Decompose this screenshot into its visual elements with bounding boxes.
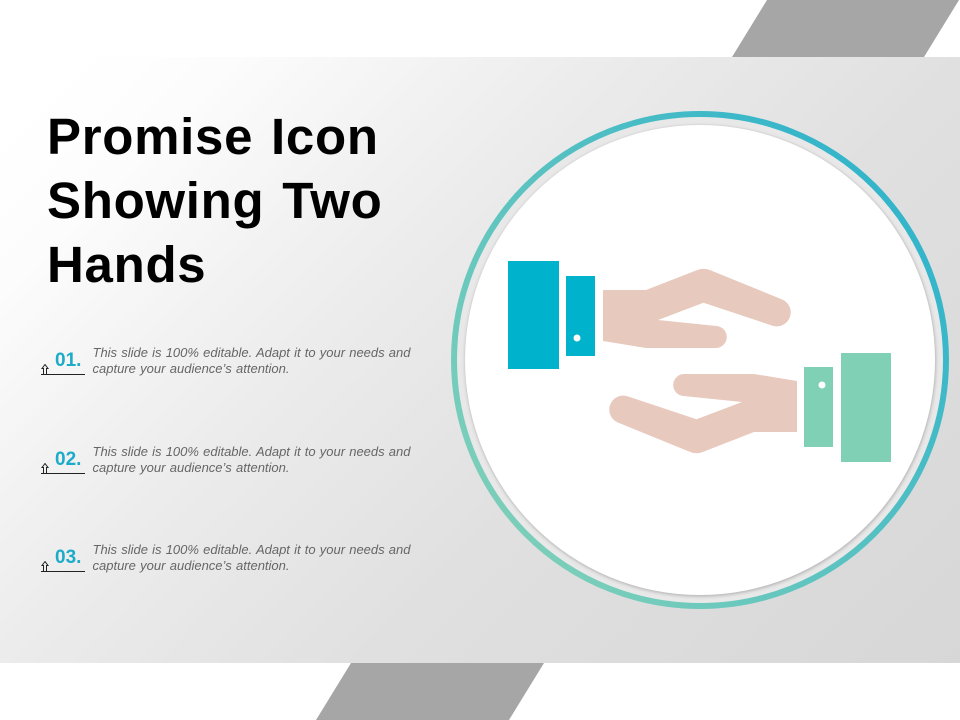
text block 03: 03. (55, 547, 81, 568)
hand (603, 269, 791, 348)
text block 01: This slide is 100% editable. Adapt it to your needs and capture your audience’s attention. (92, 345, 410, 376)
icon: upper hand with blue cuff (508, 261, 791, 369)
title: Promise Icon (47, 108, 379, 165)
white disc (465, 125, 935, 595)
blue sleeve (508, 261, 559, 369)
green cuff (804, 367, 833, 447)
text block 03: This slide is 100% editable. Adapt it to your needs and capture your audience’s attention. (92, 542, 410, 573)
cuff button (818, 382, 826, 388)
text block 01: 01. (55, 350, 81, 371)
title: Showing Two (47, 172, 383, 229)
icon: lower hand with green cuff (609, 353, 891, 462)
top grey parallelogram (732, 0, 959, 57)
text block 02: 02. (55, 449, 81, 470)
hand (609, 374, 797, 453)
title: Hands (47, 236, 206, 293)
title (47, 108, 383, 293)
blue cuff (566, 276, 595, 356)
text block 02: This slide is 100% editable. Adapt it to your needs and capture your audience’s attention. (92, 444, 410, 475)
bottom grey parallelogram (316, 663, 544, 720)
circle badge (454, 114, 946, 606)
cuff button (574, 334, 580, 342)
gradient ring (454, 114, 946, 606)
green sleeve (841, 353, 891, 462)
inner shadow edge (465, 126, 936, 596)
